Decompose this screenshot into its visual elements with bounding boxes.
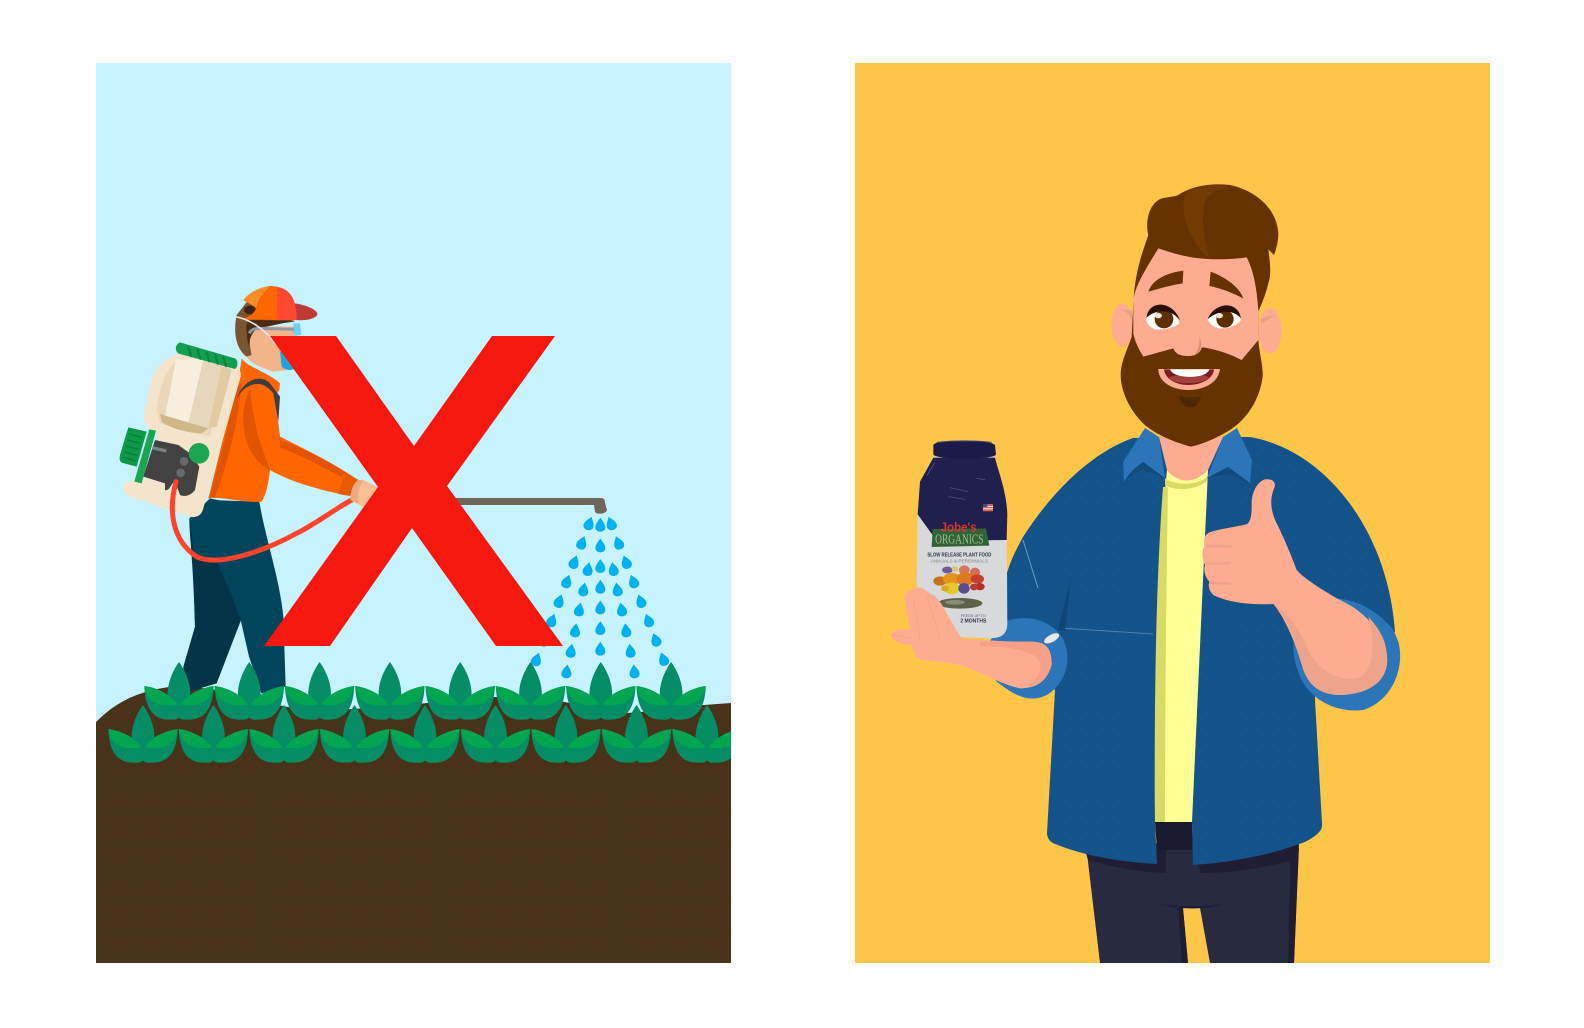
flower photo: [933, 565, 985, 594]
chin shadow: [1179, 396, 1201, 407]
yellow background: [855, 63, 1490, 963]
nose: [1173, 337, 1202, 356]
feeds up to label: FEEDS UP TO: [961, 614, 986, 618]
plants: front row: [108, 705, 742, 763]
farmer with backpack sprayer: [120, 286, 378, 693]
tank lid: [176, 342, 237, 369]
trousers: [183, 498, 286, 693]
face: [1133, 248, 1258, 360]
right sleeve cuff: [1293, 598, 1400, 711]
flag: [983, 504, 993, 511]
hair and beard: [1121, 184, 1278, 447]
eyebrows: [1148, 271, 1243, 298]
panel: chemical spraying: [96, 63, 742, 963]
hair highlight: [1183, 185, 1230, 258]
plants: back row: [144, 662, 706, 720]
yellow t-shirt: [1155, 470, 1208, 822]
organics banner: [932, 528, 989, 547]
smiling mouth: [1158, 369, 1220, 390]
granules: [938, 598, 982, 609]
pump unit: [120, 427, 209, 496]
jar of plant food: [917, 440, 1007, 638]
goggles: [249, 323, 301, 336]
organics banner: ORGANICS: [935, 532, 983, 547]
ears: [1111, 303, 1282, 353]
left eye: [1146, 305, 1180, 329]
sprayer tank: [123, 353, 241, 517]
panel: organic plant food: [855, 63, 1490, 963]
right eye: [1208, 305, 1241, 329]
water spray droplets: [530, 515, 670, 679]
red X mark: [264, 336, 563, 646]
product subtitle: ANNUALS & PERENNIALS: [931, 558, 988, 563]
brand name: Jobe's: [941, 520, 977, 535]
hair: [235, 300, 295, 357]
denim jacket: [1000, 437, 1395, 865]
feeds up to label: [960, 614, 987, 624]
navy upper label: [918, 458, 1007, 540]
jar lid: [933, 440, 996, 459]
product name: SLOW RELEASE PLANT FOOD: [927, 553, 991, 559]
spray nozzle pipe: [440, 498, 607, 514]
feeds up to label: 2 MONTHS: [960, 618, 987, 624]
jar body: [917, 457, 1007, 638]
sky background: [96, 63, 731, 722]
trousers: [1086, 840, 1299, 963]
hose: [172, 482, 352, 560]
hand holding jar: [891, 587, 1052, 688]
belt area: [1155, 822, 1193, 850]
soil ground: [96, 687, 731, 963]
neck: [1159, 437, 1223, 480]
collar: [1123, 428, 1252, 483]
thumbs-up arm: [1202, 479, 1400, 711]
orange jacket: [208, 358, 358, 502]
cap: [243, 286, 317, 320]
face mask: [235, 317, 300, 370]
arm and thumbs-up hand: [1202, 479, 1387, 695]
finger creases: [1206, 546, 1232, 584]
shoulder strap: [237, 379, 280, 422]
left sleeve cuff: [980, 618, 1067, 699]
hand: [351, 480, 378, 507]
jacket fold lines: [1023, 540, 1153, 634]
arm shading: [1273, 604, 1387, 695]
head: [1111, 184, 1282, 447]
neck and face: [247, 327, 297, 372]
